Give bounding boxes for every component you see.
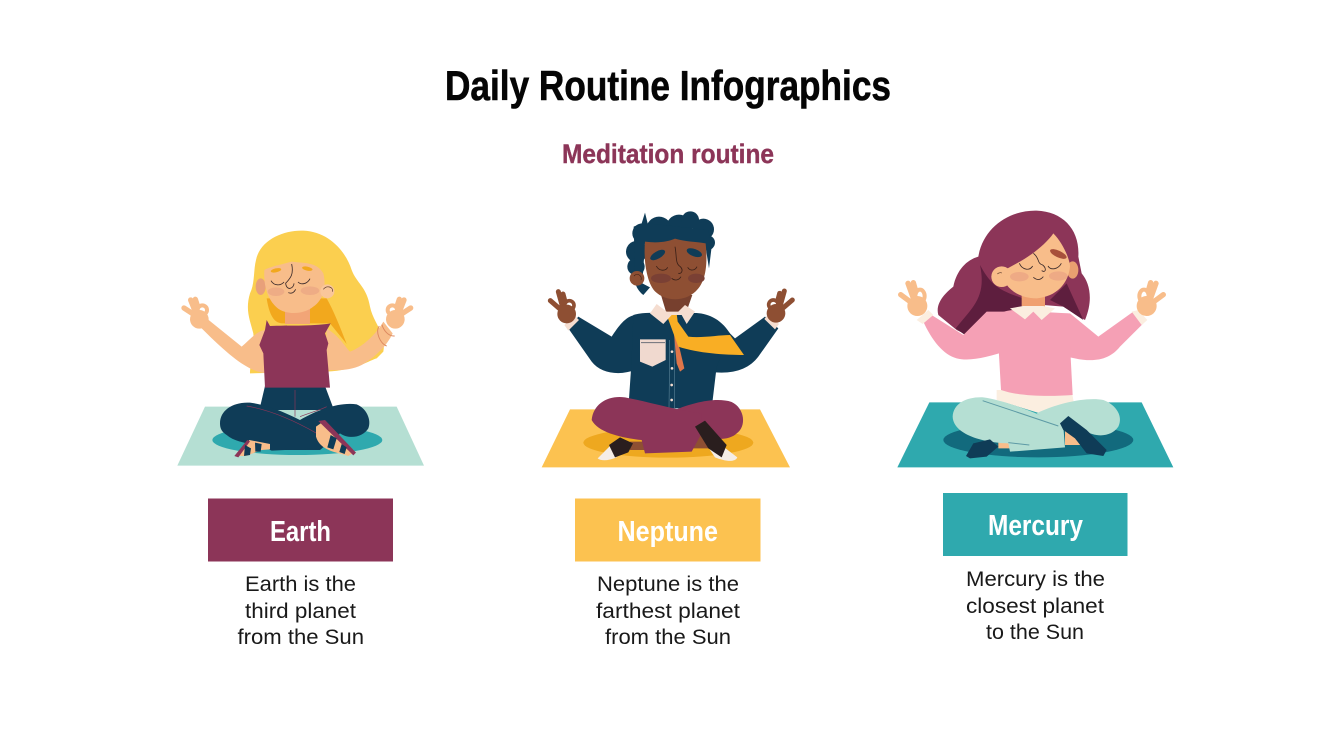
panel: Mercury	[943, 493, 1128, 644]
figure: man meditating on yellow mat	[542, 211, 792, 467]
left sneaker	[598, 437, 633, 460]
right pant leg	[675, 400, 743, 439]
left hand	[184, 299, 209, 329]
figure: woman with purple hair meditating on teal mat	[897, 211, 1173, 467]
facial features	[656, 247, 697, 280]
face	[264, 262, 325, 313]
Earth description	[238, 572, 364, 649]
panel: Neptune	[575, 498, 760, 649]
right shoe	[1060, 416, 1107, 456]
pant crease	[983, 401, 1058, 445]
Earth description: third planet	[245, 599, 356, 623]
left arm	[568, 315, 642, 373]
cuffs	[564, 314, 779, 331]
ankles	[630, 427, 712, 450]
right hand	[386, 299, 411, 329]
facial features	[271, 264, 310, 293]
inner hair shadow	[267, 298, 347, 344]
Neptune label: Neptune	[618, 516, 718, 548]
right arm	[702, 317, 778, 373]
Mercury description: Mercury is the	[966, 567, 1105, 591]
ankles	[998, 428, 1085, 448]
face	[645, 239, 706, 299]
cheeks	[268, 286, 319, 296]
left pant leg	[592, 397, 702, 453]
hair	[938, 211, 1090, 335]
button placket	[669, 340, 675, 408]
title: Daily Routine Infographics	[445, 62, 891, 109]
facial features	[1019, 253, 1061, 280]
pocket	[640, 339, 666, 367]
Mercury label box	[943, 493, 1128, 556]
Mercury description: to the Sun	[986, 620, 1084, 644]
jeans torso	[259, 386, 334, 410]
collar	[650, 304, 695, 324]
face	[1002, 233, 1070, 298]
cuffs	[917, 310, 1147, 325]
ear	[630, 271, 644, 286]
right hand	[767, 291, 792, 323]
eyebrows	[649, 246, 703, 262]
eyebrows	[270, 266, 313, 273]
figure: blonde woman meditating on mint mat	[177, 231, 424, 466]
Neptune label box	[575, 498, 760, 562]
Neptune description	[596, 572, 740, 649]
Earth label: Earth	[270, 516, 331, 548]
right leg	[280, 404, 369, 450]
cheeks	[651, 274, 705, 283]
right ear	[1067, 261, 1078, 279]
subtitle: Meditation routine	[562, 139, 774, 169]
sweater body	[998, 310, 1073, 396]
right sneaker	[695, 421, 737, 461]
neck	[285, 308, 310, 324]
neck	[1022, 295, 1045, 308]
left arm	[202, 318, 267, 373]
left hand	[901, 283, 927, 316]
left hand	[550, 292, 576, 323]
tie tail	[673, 327, 684, 372]
left ear	[256, 278, 266, 295]
Mercury description: closest planet	[966, 594, 1104, 618]
leg seam	[247, 390, 327, 433]
mat shadow	[943, 423, 1133, 457]
maroon top	[259, 320, 331, 388]
right ear	[320, 284, 334, 298]
left shoe	[966, 439, 998, 458]
hair shadow	[956, 265, 1083, 335]
bracelets	[378, 325, 395, 346]
hair	[248, 231, 384, 373]
necktie	[667, 313, 744, 355]
neck	[661, 295, 692, 314]
left pant leg	[953, 397, 1065, 452]
Mercury description	[966, 567, 1105, 644]
Neptune description: from the Sun	[605, 625, 731, 649]
right arm	[325, 322, 393, 370]
right hand	[1137, 283, 1163, 316]
curly hair	[626, 211, 715, 295]
left sandal foot	[234, 440, 270, 457]
mat shadow	[583, 428, 753, 458]
mat	[177, 407, 424, 466]
Neptune description: farthest planet	[596, 599, 740, 623]
eyebrow	[1049, 247, 1068, 261]
shirt body	[628, 313, 730, 408]
right arm	[1057, 312, 1143, 360]
right pant leg	[1037, 399, 1120, 435]
mat	[542, 409, 790, 467]
left leg	[220, 403, 320, 451]
collar	[1010, 306, 1055, 320]
mat	[897, 402, 1173, 467]
right sandal foot	[316, 420, 356, 456]
panel: Earth	[208, 498, 393, 649]
mat shadow	[212, 425, 382, 455]
Earth description: Earth is the	[245, 572, 356, 596]
Earth label box	[208, 498, 393, 562]
Neptune description: Neptune is the	[597, 572, 739, 596]
cheeks	[1010, 271, 1068, 281]
shirt tail	[997, 390, 1074, 413]
left ear	[991, 266, 1012, 287]
Earth description: from the Sun	[238, 625, 364, 649]
Mercury label: Mercury	[988, 510, 1083, 542]
left arm	[923, 312, 1010, 359]
